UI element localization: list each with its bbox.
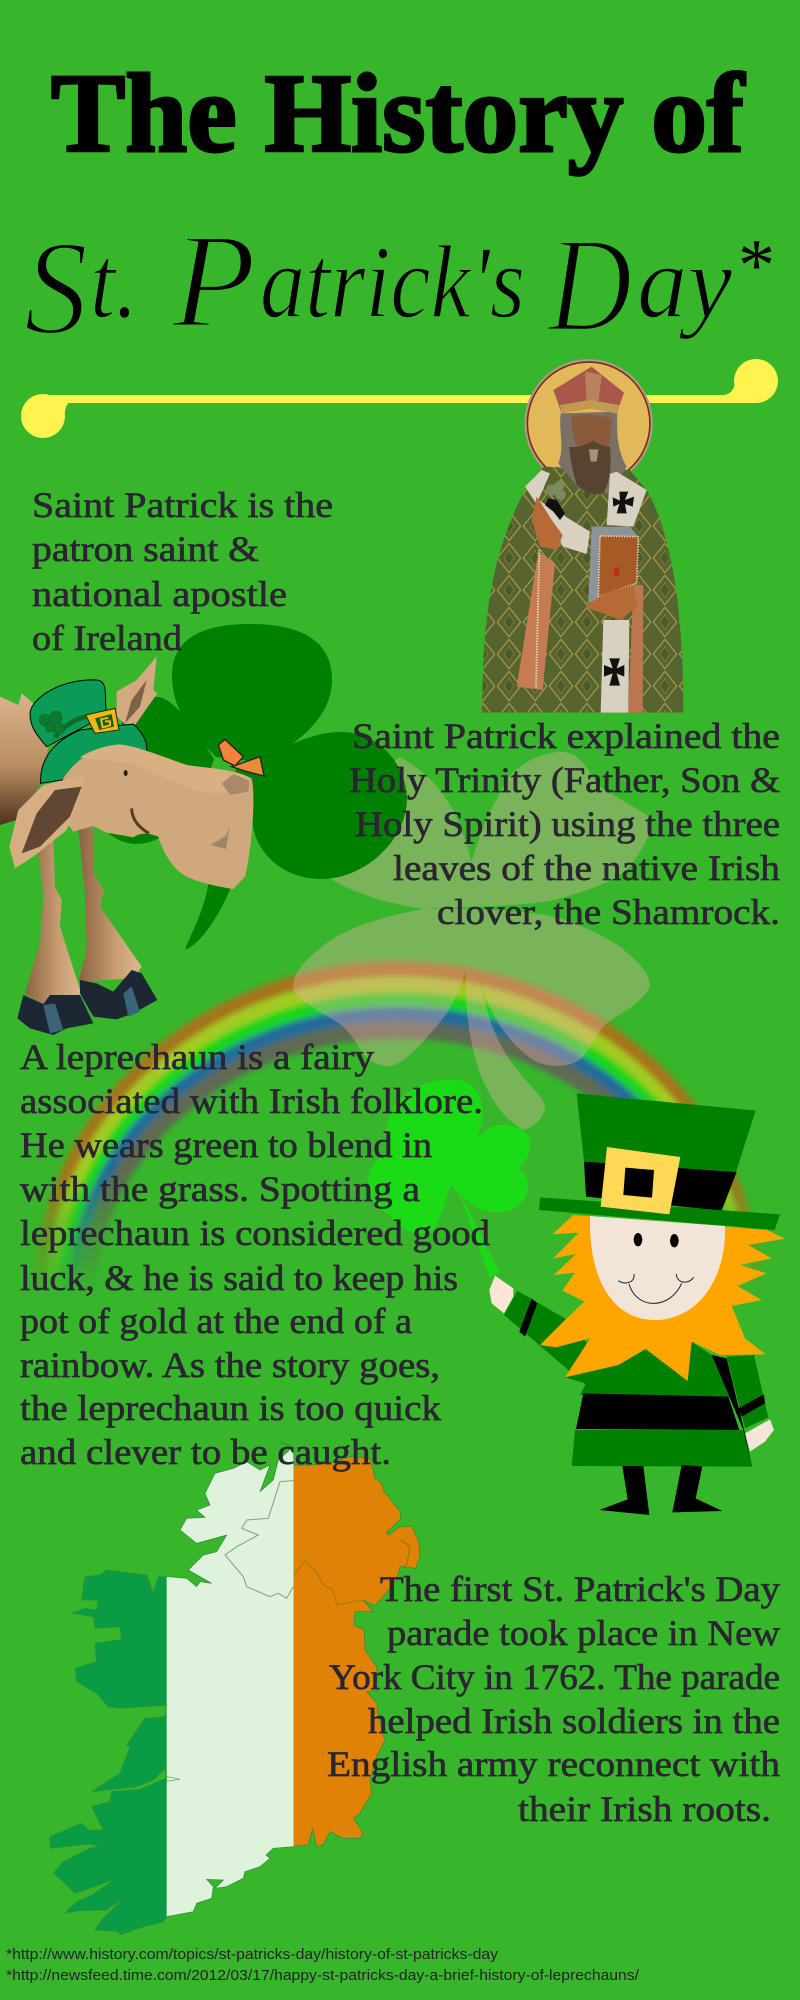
hair [558,412,627,493]
text: leprechaun: associated with Irish folklore. [20,1081,483,1121]
tunic [565,1342,729,1397]
text: leprechaun: and clever to be caught. [20,1432,391,1472]
right arm [727,1355,768,1428]
text: Holy Trinity and the Shamrock: Saint Patrick explained the [352,716,780,756]
face [590,1216,725,1320]
text: Holy Trinity and the Shamrock: clover, the Shamrock. [437,892,780,932]
moose face details [124,770,128,776]
text: patron saint: patron saint & [32,529,259,569]
text: first parade: English army reconnect with [327,1744,780,1784]
Saint Patrick figure [482,360,683,713]
moose with hat and butterfly [0,657,264,1035]
dark green shamrock [104,624,407,950]
text: first parade [327,1569,780,1829]
hat brim [41,724,147,783]
robe [482,467,683,713]
text: first parade: York City in 1762. The parade [329,1657,780,1697]
left hand [489,1276,513,1313]
moose hooves [80,970,157,1019]
title: St. Patrick's Day: atrick's [260,225,525,340]
hat ribbon [55,717,87,737]
text: Holy Trinity and the Shamrock [349,716,780,932]
text: leprechaun: He wears green to blend in [20,1125,432,1165]
text: patron saint [32,485,333,658]
source footnotes [6,1946,640,1984]
holding hand [585,585,637,620]
rainbow [34,958,762,1285]
text: leprechaun [20,1037,490,1472]
text: Holy Trinity and the Shamrock: Holy Spirit) using the three [355,804,780,844]
halo [525,360,652,487]
text: leprechaun: pot of gold at the end of a [20,1301,412,1341]
text: leprechaun: leprechaun is considered good [20,1213,490,1253]
title: St. Patrick's Day: P [171,207,256,356]
hat crown [30,680,106,747]
moose front ear [9,775,85,868]
mitre [553,367,624,413]
text: leprechaun: the leprechaun is too quick [20,1388,441,1428]
left arm [504,1291,590,1385]
text: leprechaun: A leprechaun is a fairy [20,1037,374,1077]
bright green shamrock on wand [368,1080,530,1278]
hat [577,1093,756,1172]
title: St. Patrick's Day: * [738,225,775,307]
title: St. Patrick's Day: ay [637,225,733,340]
text: patron saint: national apostle [32,574,287,614]
book [588,527,638,605]
sleeves [517,552,555,690]
text: leprechaun: rainbow. As the story goes, [20,1345,440,1385]
title: St. Patrick's Day: S [24,214,88,363]
butterfly [218,739,243,766]
source footnotes: *http://www.history.com/topics/st-patricks-day/history-of-st-patricks-day [6,1946,499,1963]
text: Holy Trinity and the Shamrock: Holy Trinity (Father, Son & [349,760,780,800]
beard [569,441,611,494]
crosses [613,492,634,513]
omophorion bands [525,470,590,554]
hat buckle [601,1147,680,1214]
right hand [745,1419,774,1452]
moose legs [25,840,82,1005]
yellow divider [21,359,778,438]
hat clover [39,711,64,734]
text: leprechaun: luck, & he is said to keep his [20,1258,458,1298]
legs [599,1466,649,1515]
source footnotes: *http://newsfeed.time.com/2012/03/17/happy-st-patricks-day-a-brief-history-of-leprechauns/ [6,1967,640,1984]
hat buckle [86,708,119,733]
title: St. Patrick's Day: t. [90,225,138,340]
title: St. Patrick's Day [24,207,775,363]
text: patron saint: Saint Patrick is the [32,485,333,525]
leprechaun [489,1093,785,1515]
moose body [0,693,48,825]
hand with shamrock [532,497,563,550]
text: first parade: The first St. Patrick's Day [380,1569,780,1609]
text: Holy Trinity and the Shamrock: leaves of the native Irish [393,848,780,888]
title: The History of: The History of [51,52,746,176]
text: leprechaun: with the grass. Spotting a [20,1169,420,1209]
text: first parade: parade took place in New [387,1613,780,1653]
moose back ear [117,657,157,730]
hair and beard [540,1215,785,1381]
text: patron saint: of Ireland [32,618,182,658]
text: first parade: their Irish roots. [518,1789,771,1829]
face [572,415,612,449]
text: first parade: helped Irish soldiers in the [368,1701,780,1741]
moose head [57,744,253,889]
pale translucent shamrock [293,752,650,1130]
title: St. Patrick's Day: D [546,211,632,360]
map of Ireland in flag colours [30,1440,430,1940]
